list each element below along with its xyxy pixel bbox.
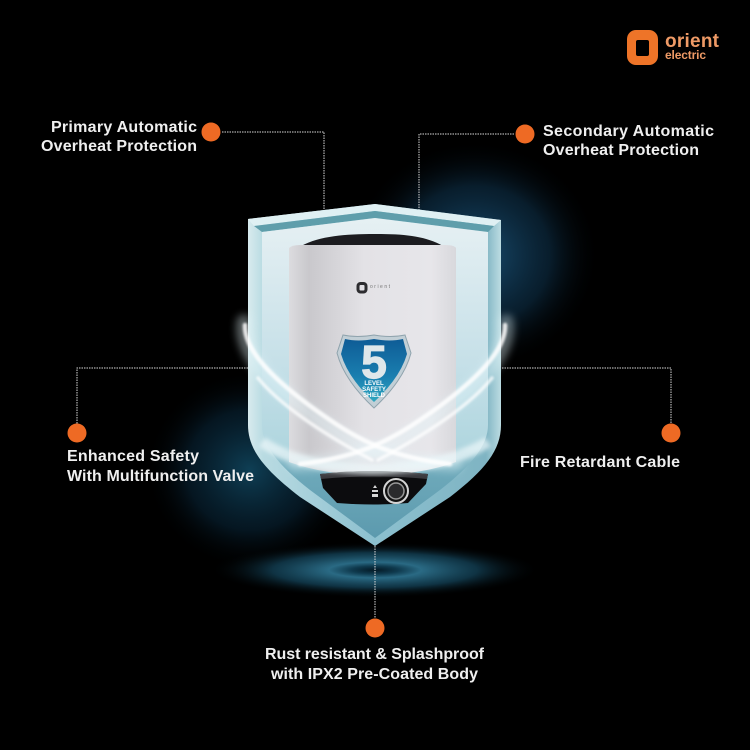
label: With Multifunction Valve (67, 468, 254, 485)
shield with water heater (248, 204, 501, 546)
dot (202, 122, 220, 142)
safety badge (337, 335, 411, 408)
logo mark (627, 30, 658, 65)
label: Rust resistant & Splashproof (265, 646, 485, 663)
tank logo text: orient (370, 284, 391, 290)
connector: rust resistant (374, 546, 376, 618)
dot (662, 424, 680, 442)
connector: fire retardant cable (502, 368, 671, 424)
outer shield (248, 204, 501, 546)
tank logo mark (358, 284, 366, 292)
label: Primary Automatic (51, 119, 197, 136)
label: with IPX2 Pre-Coated Body (270, 666, 478, 683)
label: Secondary Automatic (543, 123, 714, 140)
logo subtext: electric (665, 48, 706, 62)
panel top band (320, 471, 428, 479)
panel body (320, 471, 428, 504)
panel dial (384, 479, 408, 503)
water surface highlight (262, 442, 488, 469)
label: Fire Retardant Cable (520, 454, 680, 471)
tank logo (358, 284, 391, 292)
callout: fire retardant cable (520, 424, 680, 471)
badge number: 5 (361, 336, 387, 388)
label: Enhanced Safety (67, 448, 199, 465)
shield top rim (248, 204, 501, 226)
badge fill (341, 339, 407, 402)
label: Overheat Protection (41, 138, 197, 155)
logo: orient electric (627, 30, 720, 65)
panel icon (372, 485, 378, 497)
badge caption: SHIELD (363, 393, 386, 399)
badge caption: LEVEL (364, 381, 384, 387)
badge caption: SAFETY (362, 387, 386, 393)
badge frame (337, 335, 411, 408)
connector: multifunction valve (77, 368, 248, 424)
callout: secondary automatic overheat protection (516, 123, 714, 159)
connector: secondary protection (419, 134, 514, 212)
connector: primary protection (222, 132, 324, 212)
logo wordmark: orient (665, 31, 720, 52)
dot (68, 424, 86, 442)
background glows (145, 140, 600, 570)
swoosh light ribbons (244, 322, 506, 464)
label: Overheat Protection (543, 142, 699, 159)
callout: enhanced safety with multifunction valve (67, 424, 254, 485)
badge caption (362, 381, 386, 399)
callout: rust resistant and splashproof (265, 618, 485, 683)
dot (366, 618, 384, 638)
tank dome (301, 234, 443, 246)
floor ripple (210, 542, 540, 598)
control panel (320, 471, 428, 504)
tank body (289, 245, 456, 475)
dot (516, 124, 534, 144)
inner shield (262, 218, 488, 538)
callout: primary automatic overheat protection (41, 119, 220, 155)
